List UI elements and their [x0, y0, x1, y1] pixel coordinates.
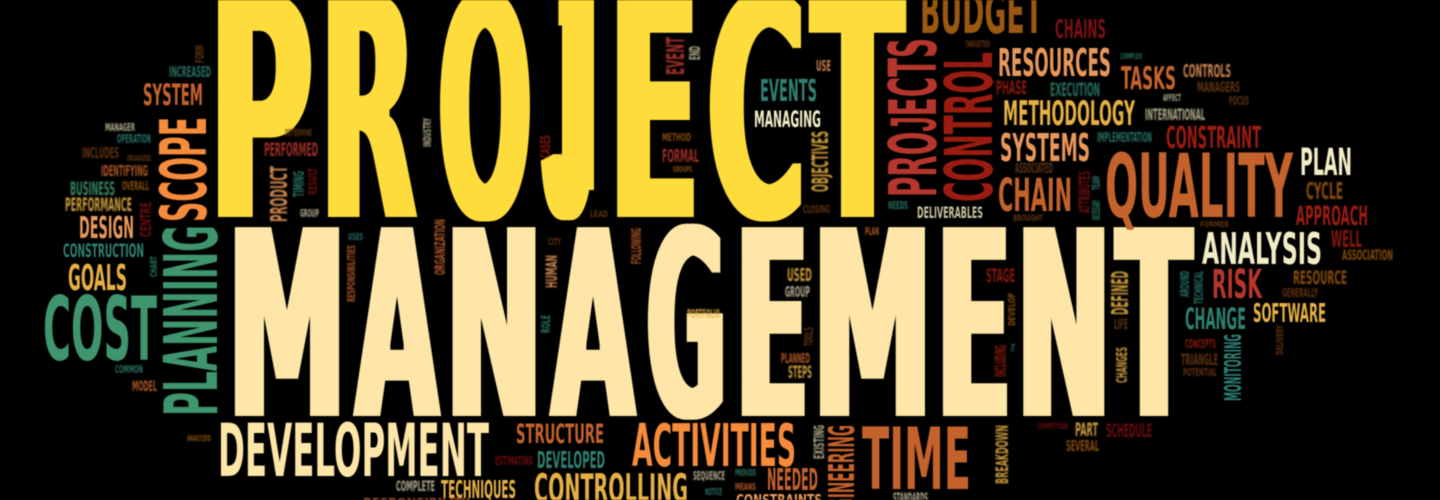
small words: upper right cluster: FORMER	[1200, 220, 1229, 229]
small words: lower right cluster: DELIVERY	[1275, 325, 1286, 355]
small words: inside MANAGEMENT: IT	[1011, 342, 1015, 355]
small words: inside PROJECT: USE	[816, 57, 831, 75]
word cloud: EVENTS	[760, 74, 817, 109]
small words: inside MANAGEMENT: RESPONSIBILITIES	[345, 245, 358, 302]
small words: bottom row: MEANS	[735, 482, 756, 493]
small words: lower right cluster: SCHEDULE	[1106, 420, 1152, 442]
small words: inside PROJECT: LEAD	[590, 210, 608, 220]
small words: inside PROJECT	[264, 37, 990, 222]
word cloud: TASKS	[1121, 61, 1176, 97]
small words: left cluster: OPERATION	[117, 132, 151, 146]
word cloud: T	[1117, 172, 1192, 482]
small words: inside PROJECT: DETERMINE	[285, 128, 312, 139]
word: ANALYSIS: ANALYSIS	[1202, 224, 1322, 275]
small words: lower right cluster: CONCEPTS	[1185, 337, 1216, 351]
small words: left cluster: COMMON	[115, 363, 143, 376]
small words: left cluster: PERFORMANCE	[65, 194, 132, 216]
small words: upper right cluster: PHASE	[996, 77, 1027, 99]
small words: inside MANAGEMENT: PLAN	[865, 225, 879, 238]
small words: inside PROJECT: NEEDS	[888, 199, 908, 212]
small words: bottom row: ESTIMATING	[495, 454, 533, 468]
small words: lower right cluster: PART	[1075, 419, 1098, 441]
small words: inside MANAGEMENT: STEPS	[788, 363, 812, 383]
small words: left cluster	[65, 45, 435, 495]
word cloud: PLAN	[1300, 141, 1352, 184]
word cloud: CONSTRAINT	[1166, 121, 1261, 156]
small words: upper right cluster: COMPLEX	[1120, 52, 1142, 61]
small words: lower right cluster: TRIANGLE	[1181, 350, 1218, 369]
word: MANAGEMENT: G	[647, 172, 726, 482]
word cloud: CONSTRUCTION	[63, 240, 144, 262]
word cloud: FORM	[193, 45, 207, 63]
word cloud: MANAGING	[754, 108, 821, 133]
small words: left cluster: ORGANIZED	[127, 154, 151, 163]
small words: lower right cluster: SEVERAL	[1066, 437, 1099, 455]
word cloud: AROUND	[1178, 271, 1192, 297]
small words: lower right cluster: POTENTIAL	[1183, 366, 1217, 379]
small words: left cluster: MODEL	[132, 379, 157, 395]
small words: upper right cluster: MANAGERS	[1197, 80, 1240, 96]
word: MANAGEMENT: E	[736, 172, 808, 482]
small words: upper right cluster: CYCLE	[1306, 179, 1343, 205]
word cloud: RESOURCES	[998, 41, 1111, 85]
small words: inside PROJECT: PERFORMED	[264, 139, 318, 161]
small words: inside MANAGEMENT: HUMAN	[542, 255, 561, 288]
small words: upper right cluster: ASSOCIATED	[1015, 161, 1053, 177]
word cloud: DELIVERABLES	[917, 203, 983, 222]
word cloud: SYSTEMS	[1000, 126, 1090, 170]
word: MANAGEMENT: E	[937, 172, 1011, 482]
small words: lower right cluster: BREAKDOWN	[993, 425, 1013, 484]
word cloud: NEEDED	[767, 463, 818, 498]
small words: inside PROJECT: GROUP	[300, 207, 319, 220]
small words: upper right cluster: CONTROLS	[1183, 61, 1231, 82]
small words: left cluster: INCREASED	[169, 63, 211, 81]
word cloud: COMPLETE	[396, 479, 435, 495]
word cloud: TARGETED	[965, 40, 990, 50]
small words: upper right cluster: EXECUTION	[1050, 79, 1100, 101]
small words: inside PROJECT: RESULT	[306, 168, 320, 195]
word cloud: DEVELOPMENT	[218, 409, 489, 494]
small words: bottom row: PROVIDE	[735, 468, 756, 479]
small words: inside MANAGEMENT: USED	[787, 265, 812, 286]
word cloud: CHAIN	[998, 169, 1072, 222]
word cloud: RISK	[1212, 262, 1263, 308]
small words: left cluster: CHART	[149, 256, 160, 277]
small words: inside MANAGEMENT: CITY	[548, 237, 561, 248]
small words: upper right cluster: TEAM	[1090, 176, 1103, 190]
small words: inside MANAGEMENT	[345, 219, 1134, 383]
small words: left cluster: CENTRE	[137, 202, 155, 237]
word cloud: ORGANIZATION	[433, 219, 449, 275]
small words: upper right cluster: BROUGHT	[1013, 214, 1044, 224]
small words: upper right cluster: NECESSARY	[1090, 200, 1103, 220]
small words: inside MANAGEMENT: LIFE	[1114, 317, 1128, 333]
word cloud: STRUCTURE	[516, 419, 604, 450]
word cloud: CHANGE	[1185, 302, 1246, 336]
word cloud: DESIGN	[79, 211, 134, 246]
word cloud: SOFTWARE	[1253, 299, 1326, 329]
small words: inside PROJECT: CASES	[539, 135, 554, 158]
small words: inside PROJECT: GROUPS	[673, 165, 692, 174]
word: MANAGEMENT: N	[1017, 172, 1111, 482]
small words: inside PROJECT: FORMAL	[662, 146, 699, 167]
word cloud: EXISTING	[812, 425, 828, 459]
word cloud: METHODOLOGY	[1003, 94, 1135, 134]
small words: bottom row: SEQUENCE	[693, 469, 725, 483]
small words: upper right cluster: GENERALLY	[1282, 286, 1318, 300]
small words: inside MANAGEMENT: GROUP	[785, 283, 810, 301]
small words: inside MANAGEMENT: INCLUDING	[991, 345, 1010, 377]
small words: inside PROJECT: METHOD	[662, 131, 691, 144]
small words: inside MANAGEMENT: PORTFOLIO	[687, 307, 720, 321]
word cloud: COST	[43, 278, 157, 381]
small words: inside MANAGEMENT: TOOLS	[802, 327, 816, 346]
small words: upper right cluster: INTERNATIONAL	[1145, 105, 1205, 124]
small words: lower right cluster: COMPETITION	[1037, 422, 1068, 431]
small words: inside PROJECT: TIMING	[290, 171, 308, 197]
word: MANAGEMENT: A	[356, 172, 439, 482]
small words: inside MANAGEMENT: DEVELOP	[1007, 293, 1018, 326]
small words: inside MANAGEMENT: ROLE	[539, 315, 553, 333]
word: MANAGEMENT: M	[228, 172, 346, 482]
small words: upper right cluster: AFFECT	[1163, 93, 1181, 104]
small words: inside MANAGEMENT: CHANGES	[1113, 347, 1131, 383]
small words: inside MANAGEMENT: STAGE	[986, 265, 1015, 287]
small words: inside MANAGEMENT: FOLLOWING	[630, 228, 645, 264]
small words: left cluster: ANALYZED	[187, 434, 211, 443]
word: MANAGEMENT: A	[552, 172, 635, 482]
word: PROJECT	[209, 0, 904, 295]
small words: inside PROJECT: CLOSING	[803, 203, 830, 216]
word cloud: TECHNICAL	[1192, 271, 1206, 304]
small words: left cluster: OVERALL	[122, 179, 149, 193]
small words: upper right cluster: WELL	[1331, 227, 1362, 253]
small words: bottom row	[363, 425, 928, 500]
small words: left cluster: INCLUDES	[82, 144, 119, 162]
word cloud: CHAINS	[1055, 15, 1106, 45]
word: MANAGEMENT: M	[813, 172, 932, 482]
word cloud: SYSTEM	[143, 78, 203, 112]
small words: left cluster: MANAGER	[105, 121, 135, 134]
small words: upper right cluster: RESOURCE	[1293, 267, 1347, 289]
small words: inside PROJECT: OBJECTIVES	[809, 131, 834, 192]
small words: left cluster: IDENTIFYING	[101, 162, 148, 180]
small words: inside PROJECT: PRODUCT	[267, 166, 293, 222]
word cloud: GOALS	[68, 258, 127, 299]
small words: bottom row: NOTICE	[705, 487, 722, 498]
small words: lower right cluster	[993, 271, 1286, 484]
small words: inside MANAGEMENT: DEFINED	[1108, 271, 1134, 315]
small words: inside MANAGEMENT: USES	[348, 232, 363, 243]
word: MANAGEMENT: N	[446, 172, 542, 482]
small words: upper right cluster	[996, 52, 1393, 300]
small words: upper right cluster: IMPLEMENTATION	[1097, 131, 1152, 146]
small words: inside MANAGEMENT: PLANNED	[781, 352, 810, 367]
word cloud: MONITORING	[1221, 334, 1247, 401]
word cloud: DEVELOPED	[537, 448, 605, 474]
word cloud: ACTIVITIES	[632, 411, 796, 480]
small words: inside PROJECT: INDUSTRY	[421, 118, 434, 147]
small words: left cluster: BUSINESS	[70, 178, 115, 200]
small words: inside PROJECT: END	[686, 46, 704, 60]
small words: upper right cluster: ATTRIBUTES	[1075, 171, 1094, 213]
small words: upper right cluster: FOCUS	[1229, 94, 1249, 108]
